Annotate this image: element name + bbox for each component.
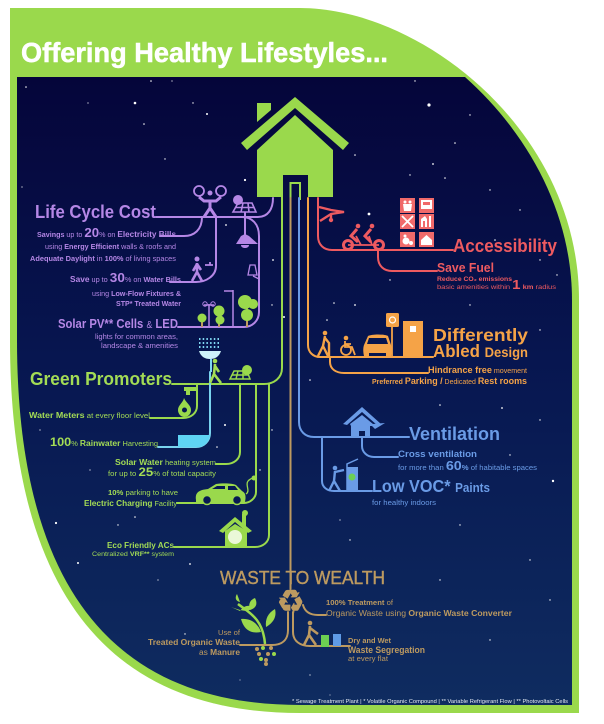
panel: differently abled design <box>308 198 528 386</box>
text: manure <box>148 628 241 657</box>
icon: eco house with snowflake <box>219 510 252 547</box>
text: savings on electricity: Adequate Daylight in 100% of living spaces <box>30 256 177 263</box>
icon: person with bins <box>304 621 341 647</box>
text: organic waste treatment: Organic Waste using Organic Waste Converter <box>326 609 512 618</box>
text: electric charging: Electric Charging Facility <box>84 499 178 508</box>
text: waste segregation: Waste Segregation <box>348 645 425 655</box>
text: solar water: for up to 25% of total capacity <box>108 465 217 479</box>
text: electric charging: 10% parking to have <box>108 490 178 497</box>
text: savings on water: Save up to 30% on Water Bills <box>70 270 181 285</box>
text: waste segregation <box>348 638 425 663</box>
text: savings on electricity <box>30 225 177 263</box>
icon: rain shower <box>199 339 221 372</box>
heading: ventilation: Ventilation <box>409 423 500 444</box>
text: eco friendly acs <box>92 541 175 558</box>
text: save fuel <box>437 261 557 292</box>
text: organic waste treatment <box>326 600 512 618</box>
text: eco friendly acs: Centralized VRF** system <box>92 551 174 558</box>
text: electric charging <box>84 490 178 508</box>
text: hindrance free <box>372 365 527 386</box>
heading: low voc paints: Low VOC* Paints <box>372 476 490 496</box>
text: save fuel: basic amenities within 1 km radius <box>437 277 557 292</box>
icon: person with coins <box>194 186 226 217</box>
heading: waste to wealth: WASTE TO WEALTH <box>220 568 385 588</box>
text: savings on water: using Low-Flow Fixtures & <box>92 291 181 298</box>
heading: differently abled design: Differently <box>433 325 528 345</box>
panel: life cycle cost <box>30 186 273 350</box>
text: solar water: Solar Water heating system <box>115 458 216 467</box>
icon: person with cane <box>318 331 329 356</box>
text: save fuel: Save Fuel <box>437 261 494 275</box>
text: hindrance free: Hindrance free movement <box>428 365 527 375</box>
text: waste segregation: at every flat <box>348 656 388 663</box>
panel: waste to wealth <box>148 198 512 666</box>
icon: rest room door <box>403 321 423 357</box>
connector lines: accessibility <box>318 198 453 271</box>
icon: walking person and tap <box>192 256 213 281</box>
icon: house <box>241 97 349 200</box>
heading: differently abled design <box>433 325 528 361</box>
text: for healthy indoors: for healthy indoors <box>372 500 437 507</box>
connector lines: life cycle cost <box>156 198 273 327</box>
icon: solar panel <box>233 195 256 217</box>
text: cross ventilation: Cross ventilation <box>398 449 477 459</box>
connector lines: ventilation <box>299 198 409 491</box>
icon: wall lamp <box>248 265 259 279</box>
text: manure: Treated Organic Waste <box>148 638 241 647</box>
icon: walking person <box>210 359 221 383</box>
text: rainwater harvesting: 100% Rainwater Harvesting <box>50 435 158 449</box>
text: savings on electricity: Savings up to 20% on Electricity Bills <box>37 225 177 240</box>
panel: ventilation <box>299 198 538 507</box>
text: eco friendly acs: Eco Friendly ACs <box>107 541 175 550</box>
text: cross ventilation: for more than 60% of habitable spaces <box>398 458 538 473</box>
icon: electric car <box>196 476 256 504</box>
connector lines: green promoters <box>150 197 282 547</box>
icon: water tap and drop <box>178 387 196 417</box>
connector lines: waste <box>240 198 350 646</box>
starfield <box>21 80 558 695</box>
text: water meters: Water Meters at every floor level <box>29 411 150 420</box>
text: organic waste treatment: 100% Treatment of <box>326 600 393 607</box>
icon: sapling <box>231 594 276 644</box>
icon: ventilated house <box>343 407 385 437</box>
connector lines: differently abled <box>308 198 433 373</box>
heading: differently abled design: Abled Design <box>433 341 528 361</box>
icon: person painting <box>329 459 358 491</box>
text: solar pv cells and led <box>58 316 179 350</box>
text: solar pv cells and led: Solar PV** Cells & LED <box>58 316 178 331</box>
text: waste segregation: Dry and Wet <box>348 638 392 645</box>
icon: wheelchair <box>341 336 355 355</box>
icon: pendant lamp <box>236 234 258 248</box>
title: Offering Healthy Lifestyles... <box>21 37 388 68</box>
icon: car <box>363 334 392 356</box>
panel: night sky <box>17 77 572 705</box>
text: hindrance free: Preferred Parking / Dedicated Rest rooms <box>372 376 527 386</box>
icon: direction arrow <box>319 207 344 222</box>
icon: street lamps and trees <box>198 290 258 327</box>
heading: life cycle cost: Life Cycle Cost <box>35 201 156 222</box>
text: cross ventilation <box>398 449 538 473</box>
icon: solar panel with sun <box>230 365 252 379</box>
text: manure: as Manure <box>199 648 241 657</box>
text: solar pv cells and led: lights for common areas, <box>95 334 178 341</box>
icon: roots and soil <box>255 646 276 666</box>
text: savings on electricity: using Energy Efficient walls & roofs and <box>45 244 176 251</box>
heading: accessibility: Accessibility <box>453 236 557 256</box>
text: solar water <box>108 458 217 479</box>
icon: rainwater tank <box>178 435 210 447</box>
text: save fuel: Reduce CO₂ emissions <box>437 276 512 283</box>
icon: amenity grid <box>400 198 434 247</box>
icon: recycling symbol: ♻ <box>277 584 304 620</box>
footnote: * Sewage Treatment Plant | * Volatile Organic Compound | ** Variable Refrigerant Flow | ** Photovoltaic Cells <box>292 699 569 705</box>
heading: green promoters: Green Promoters <box>30 368 172 389</box>
text: savings on water <box>70 270 181 308</box>
icon: accessible parking sign <box>386 313 399 356</box>
text: savings on water: STP* Treated Water <box>116 301 181 308</box>
panel: green promoters <box>29 197 282 558</box>
icon: tandem bicycle <box>344 224 384 250</box>
text: solar pv cells and led: landscape & amenities <box>101 343 179 350</box>
text: manure: Use of <box>218 628 241 637</box>
panel: accessibility <box>318 198 557 292</box>
